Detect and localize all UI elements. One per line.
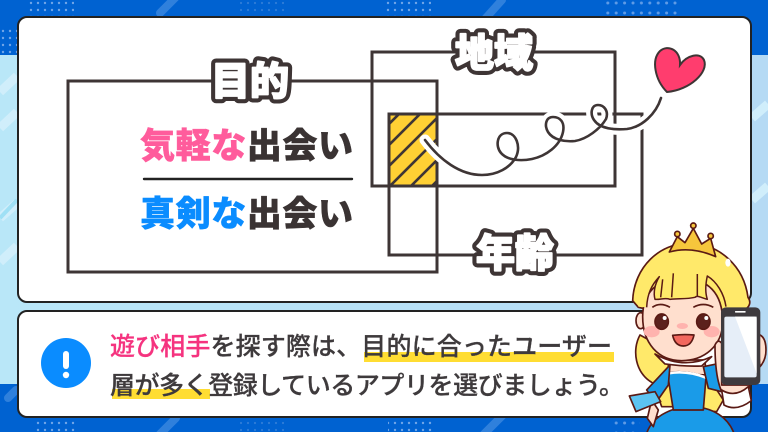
- left cuff: [629, 392, 661, 412]
- lace: [668, 372, 706, 378]
- hair shine: [725, 259, 731, 267]
- bottom panel: [18, 311, 751, 417]
- label: 地域: 地域: [455, 33, 533, 76]
- hair cap back: [633, 243, 750, 312]
- phone: [721, 307, 760, 385]
- nose: [677, 323, 688, 329]
- box: 年齢: [389, 114, 642, 255]
- fringe outline: [647, 273, 726, 307]
- label: 目的: 目的: [211, 61, 289, 104]
- face: [643, 278, 723, 361]
- fringe: [638, 260, 737, 307]
- label: 目的: 目的: [211, 61, 289, 104]
- back hair right: [700, 367, 723, 412]
- overlap hatch: [390, 116, 436, 184]
- eyes: [655, 314, 668, 329]
- label: 年齢: 年齢: [476, 233, 554, 276]
- left sleeve: [647, 365, 670, 403]
- label: 地域: 地域: [455, 33, 533, 76]
- box: 目的: [68, 81, 437, 272]
- chest: [668, 360, 706, 375]
- venn diagram: [68, 52, 642, 272]
- right fingers: [757, 334, 766, 367]
- left arm: [647, 400, 658, 427]
- icon: heart: [655, 48, 705, 92]
- dress skirt: [647, 407, 734, 432]
- blush: [644, 326, 660, 337]
- icon: exclamation: [41, 338, 91, 388]
- collar: [655, 354, 712, 366]
- crown: [669, 223, 716, 257]
- right cuff: [722, 387, 751, 408]
- text: 真剣な出会い: 真剣な出会い: [140, 195, 353, 234]
- highlight: line 2: [112, 389, 210, 399]
- mouth: [673, 335, 694, 346]
- advice line 1: 遊び相手を探す際は、目的に合ったユーザー: [110, 333, 612, 361]
- ear: [636, 313, 645, 329]
- divider: [144, 178, 352, 180]
- label: 年齢: 年齢: [476, 233, 554, 276]
- thumb and palm: [715, 341, 750, 395]
- brows: [652, 304, 713, 307]
- highlight: line 1: [364, 352, 614, 362]
- character: princess with smartphone: [629, 223, 766, 432]
- text: 気軽な出会い: 気軽な出会い: [140, 127, 353, 166]
- curved thread with loops: [425, 98, 661, 175]
- bodice: [667, 372, 706, 410]
- back hair left: [636, 335, 675, 407]
- main panel: [18, 17, 751, 302]
- box: 地域: [372, 52, 615, 186]
- advice line 2: 層が多く登録しているアプリを選びましょう。: [110, 372, 624, 400]
- right sleeve: [703, 364, 722, 392]
